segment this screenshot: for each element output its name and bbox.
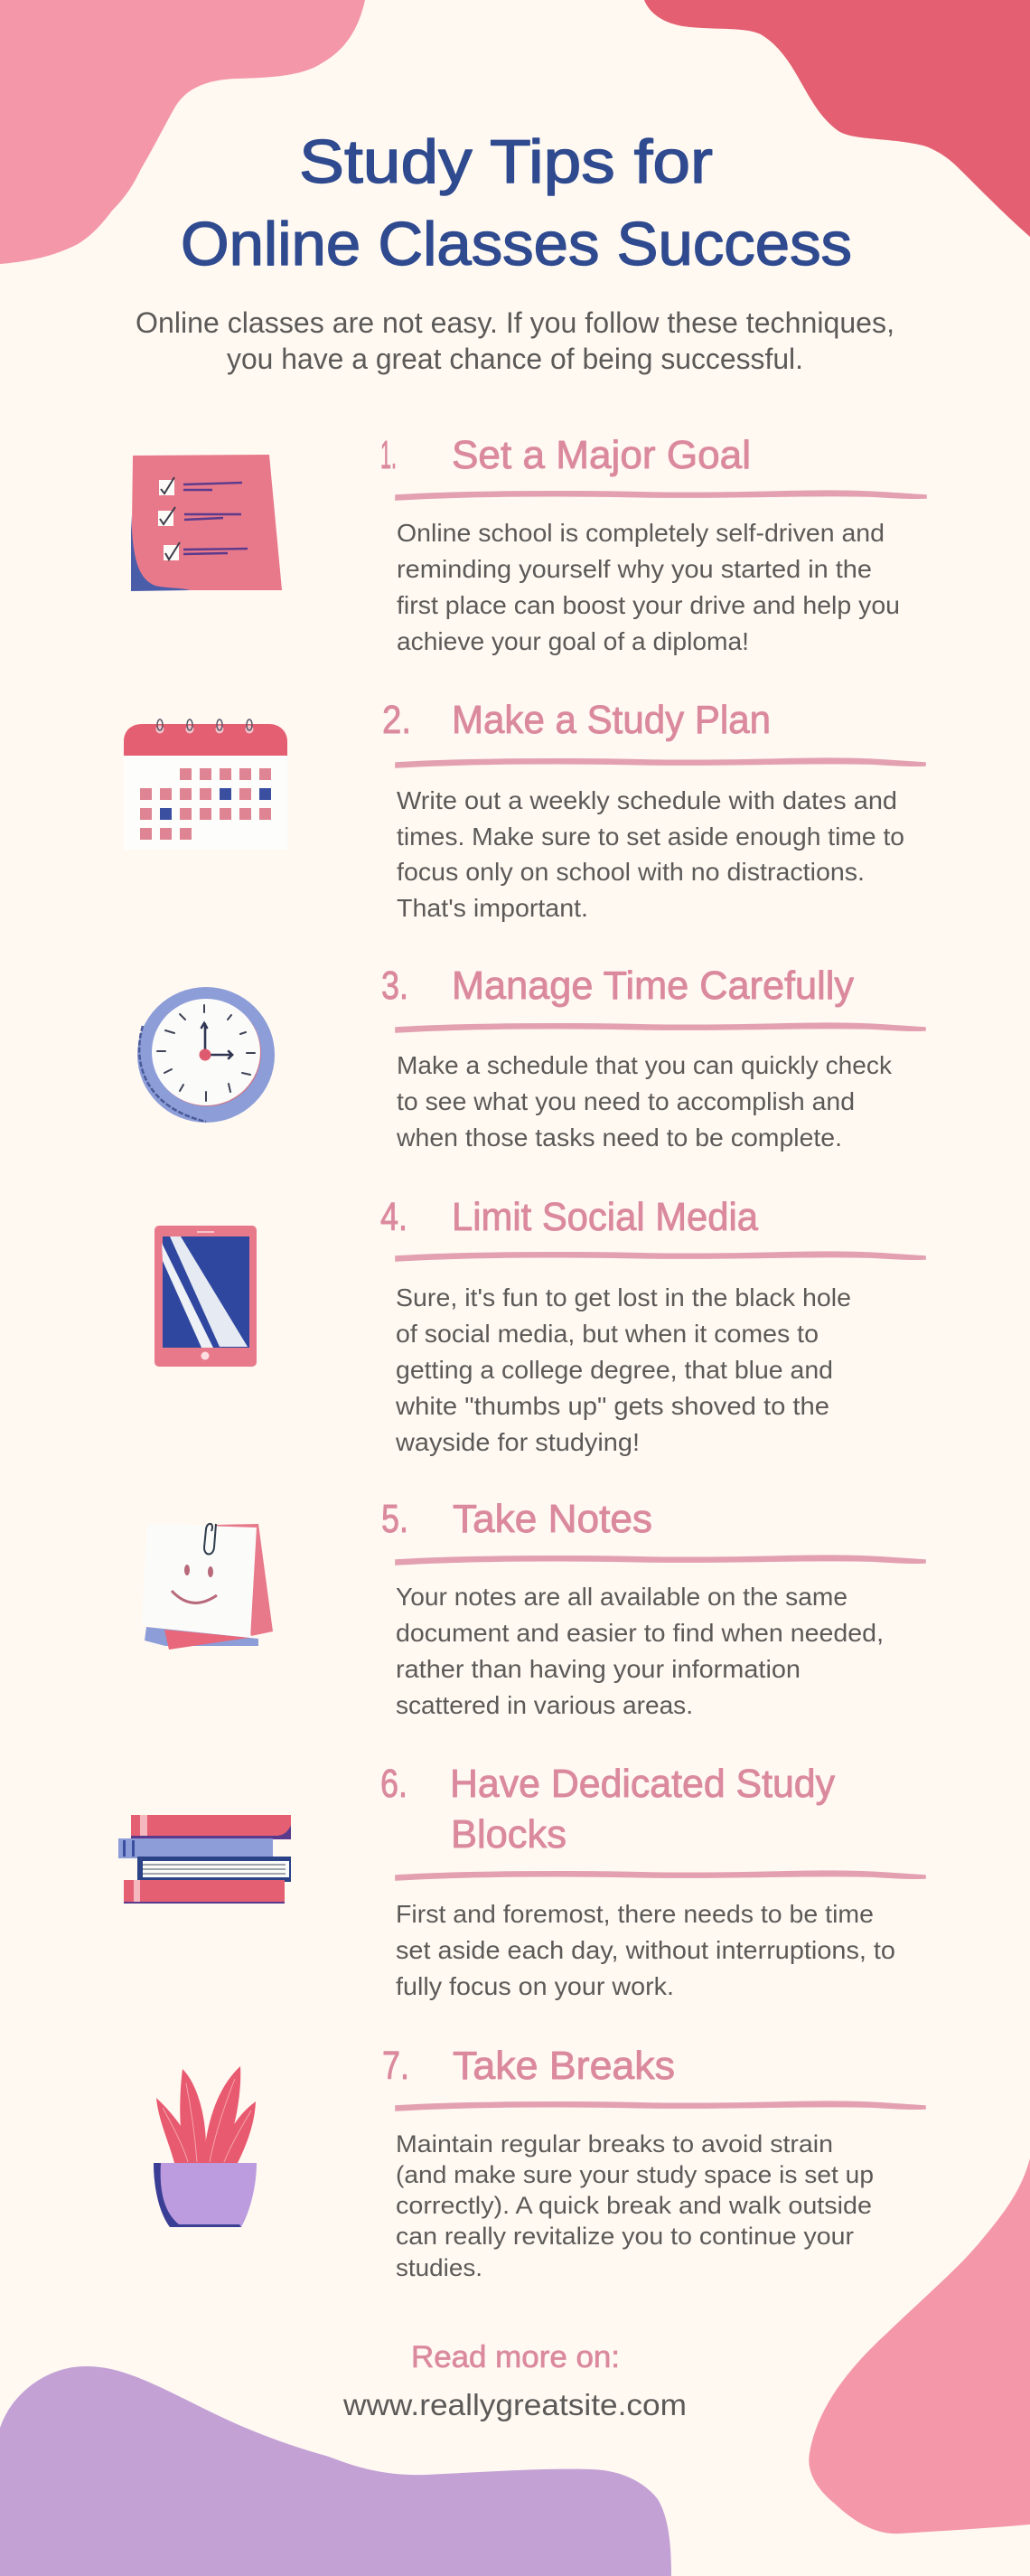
body 1: reminding yourself why you started in the	[397, 555, 872, 583]
body 6	[396, 1900, 895, 2000]
body 5: document and easier to find when needed,	[396, 1619, 884, 1647]
body 1: achieve your goal of a diploma!	[397, 627, 749, 655]
title: Online Classes Success	[181, 210, 852, 278]
icon: sticky notes	[142, 1524, 273, 1650]
body 1	[397, 519, 900, 655]
body 5: rather than having your information	[396, 1655, 801, 1683]
body 2: times. Make sure to set aside enough time to	[397, 823, 904, 851]
body 7: can really revitalize you to continue your	[396, 2223, 854, 2250]
intro text: Online classes are not easy. If you follow these techniques,	[136, 306, 894, 339]
body 5	[396, 1583, 884, 1719]
heading 4: 4.	[380, 1195, 407, 1239]
heading 3: 3.	[381, 964, 408, 1008]
body 5: scattered in various areas.	[396, 1691, 693, 1719]
heading 5: Take Notes	[453, 1497, 652, 1541]
heading 2: Make a Study Plan	[452, 698, 771, 742]
body 7: studies.	[396, 2254, 482, 2281]
blob: bottom left lavender	[0, 2366, 671, 2576]
heading 1: Set a Major Goal	[452, 433, 751, 477]
body 7: (and make sure your study space is set up	[396, 2161, 874, 2188]
body 4: white "thumbs up" gets shoved to the	[395, 1392, 829, 1420]
intro text: you have a great chance of being successful.	[227, 343, 803, 375]
body 3: when those tasks need to be complete.	[396, 1123, 842, 1152]
icon: clock	[137, 987, 275, 1123]
body 1: first place can boost your drive and help you	[397, 591, 900, 619]
title: Study Tips for	[299, 127, 713, 196]
body 6: set aside each day, without interruptions, to	[396, 1936, 895, 1964]
heading 1: 1.	[380, 433, 397, 477]
body 4: getting a college degree, that blue and	[396, 1356, 833, 1384]
body 6: First and foremost, there needs to be time	[396, 1900, 874, 1928]
body 4: of social media, but when it comes to	[396, 1320, 819, 1348]
intro text	[136, 306, 894, 375]
body 7	[396, 2130, 874, 2281]
body 7: correctly). A quick break and walk outside	[396, 2192, 872, 2219]
body 2: That's important.	[397, 894, 588, 922]
icon: checklist note	[131, 455, 282, 591]
body 2: focus only on school with no distractions.	[397, 858, 865, 886]
heading 6: Blocks	[451, 1812, 566, 1857]
body 6: fully focus on your work.	[396, 1972, 674, 2000]
footer label: Read more on:	[411, 2340, 620, 2374]
title	[181, 127, 852, 278]
heading 6: Have Dedicated Study	[450, 1762, 835, 1806]
icon: tablet	[154, 1226, 257, 1367]
heading 7: 7.	[382, 2044, 409, 2088]
heading 6	[380, 1762, 835, 1857]
blob: top right red	[644, 0, 1030, 237]
body 2	[397, 786, 904, 922]
body 4	[395, 1283, 851, 1456]
body 3	[396, 1051, 893, 1152]
body 1: Online school is completely self-driven and	[397, 519, 885, 547]
icon: calendar	[124, 719, 287, 850]
blob: bottom right pink	[809, 2158, 1030, 2534]
heading 6: 6.	[380, 1762, 407, 1806]
icon: book stack	[118, 1815, 291, 1904]
body 4: Sure, it's fun to get lost in the black hole	[396, 1283, 851, 1312]
heading 5: 5.	[381, 1497, 408, 1541]
heading 2: 2.	[382, 698, 411, 742]
icon: potted plant	[154, 2066, 257, 2227]
heading 4: Limit Social Media	[452, 1195, 758, 1239]
body 4: wayside for studying!	[395, 1428, 640, 1456]
blob: top left pink	[0, 0, 365, 264]
body 7: Maintain regular breaks to avoid strain	[396, 2130, 833, 2158]
body 2: Write out a weekly schedule with dates and	[397, 786, 897, 814]
heading 7: Take Breaks	[453, 2044, 675, 2088]
body 3: Make a schedule that you can quickly check	[397, 1051, 893, 1079]
body 3: to see what you need to accomplish and	[397, 1087, 855, 1115]
footer website: www.reallygreatsite.com	[342, 2388, 687, 2421]
body 5: Your notes are all available on the same	[396, 1583, 847, 1611]
heading 3: Manage Time Carefully	[452, 964, 854, 1008]
